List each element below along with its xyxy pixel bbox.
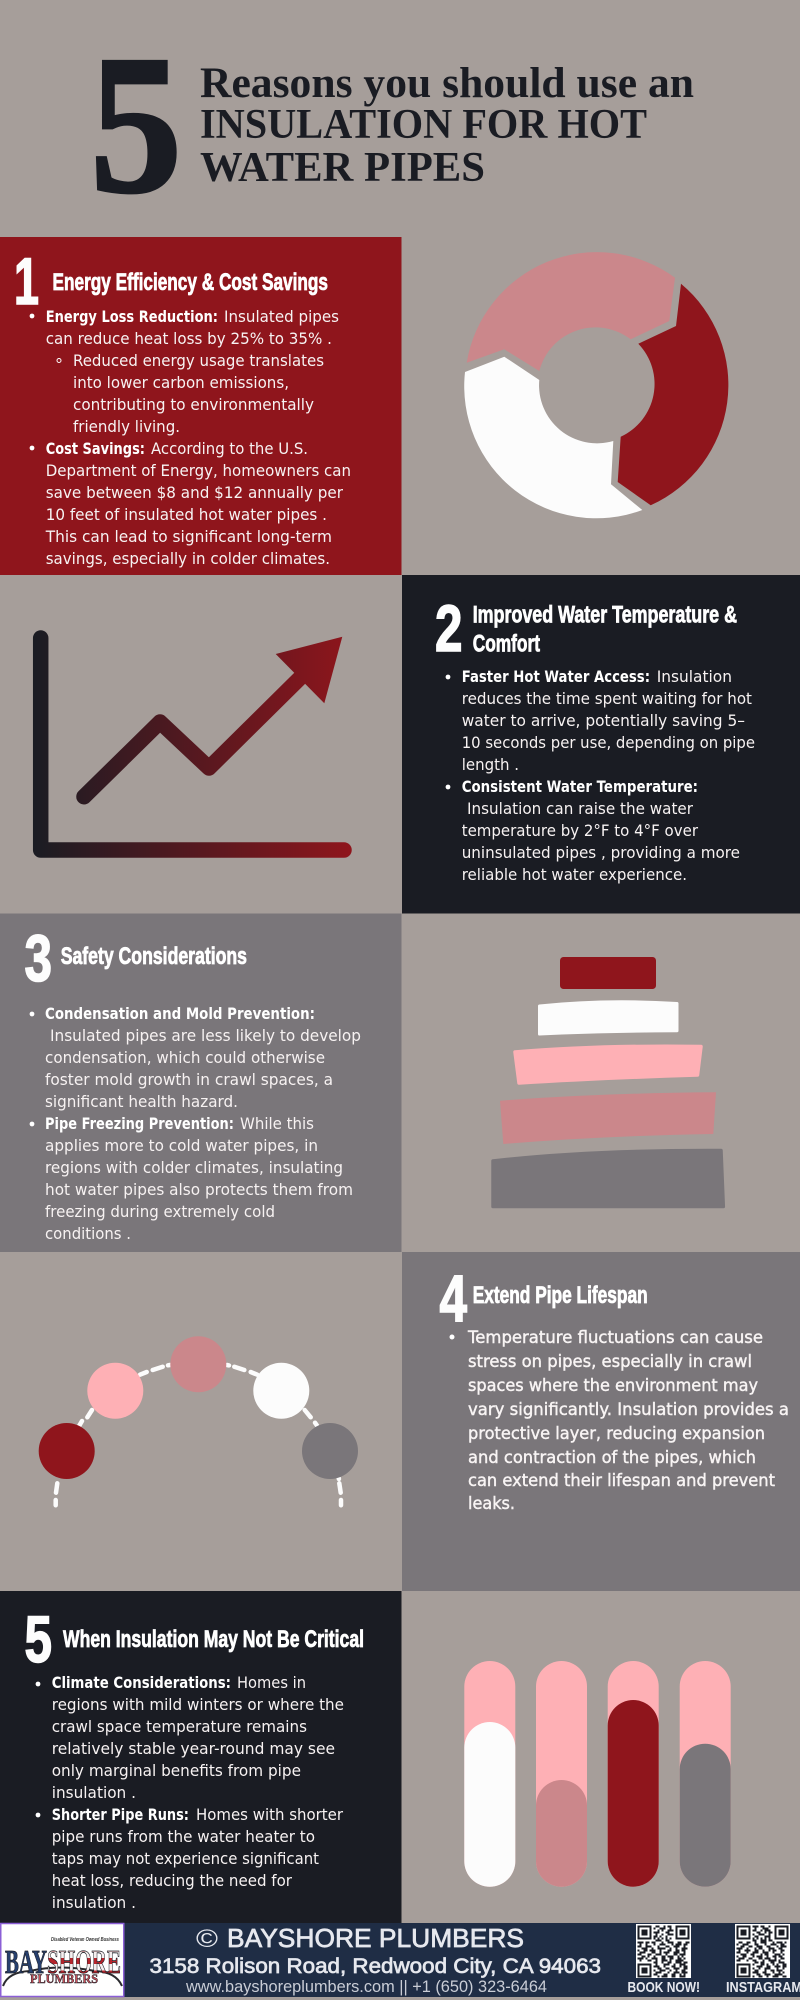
bullet list 4: can extend their lifespan and prevent [468, 1471, 775, 1491]
bullet list 4: and contraction of the pipes, which [468, 1448, 756, 1468]
donut chart [464, 252, 728, 518]
panel: safety considerations [0, 914, 402, 1252]
panel: energy efficiency and cost savings [0, 237, 402, 575]
bullet list 2: length . [462, 755, 519, 774]
address: 3158 Rolison Road, Redwood City, CA 94063 [150, 1954, 601, 1978]
panel: improved water temperature and comfort [402, 575, 800, 914]
bullet list 2: 10 seconds per use, depending on pipe [462, 733, 755, 752]
bullet list 1: Reduced energy usage translates [73, 351, 324, 370]
bullet list 2: uninsulated pipes , providing a more [462, 843, 740, 862]
bullet list 1: Energy Loss Reduction: [46, 307, 218, 326]
bullet list 4: Temperature fluctuations can cause [467, 1328, 763, 1348]
bullet list 2: Faster Hot Water Access: [462, 667, 650, 686]
number 2: 2 [435, 591, 462, 665]
bullet list 1: save between $8 and $12 annually per [46, 483, 343, 502]
bullet list 3: foster mold growth in crawl spaces, a [45, 1070, 333, 1089]
bullet list 1: friendly living. [73, 417, 180, 436]
title line 2: INSULATION FOR HOT [200, 102, 647, 148]
bullet list 4: vary significantly. Insulation provides a [468, 1400, 789, 1420]
bullet list 4: protective layer, reducing expansion [468, 1424, 765, 1444]
bullet list 5: Homes with shorter [196, 1805, 343, 1824]
QR code: book now [636, 1924, 691, 1978]
number 5: 5 [24, 1602, 52, 1676]
company logo: SHORE [47, 1944, 121, 1981]
bullet list 2: reliable hot water experience. [462, 865, 687, 884]
panel: extend pipe lifespan [402, 1252, 800, 1591]
bullet list 5: Climate Considerations: [52, 1673, 231, 1692]
line chart with rising arrow [41, 637, 344, 850]
title line 1: Reasons you should use an [200, 60, 694, 107]
bullet list 1: 10 feet of insulated hot water pipes . [46, 505, 327, 524]
website and phone: www.bayshoreplumbers.com || +1 (650) 323-6464 [185, 1978, 547, 1996]
bullet list 5: only marginal benefits from pipe [52, 1761, 301, 1780]
bullet list 3: Insulated pipes are less likely to develop [50, 1026, 361, 1045]
bullet list 4: leaks. [468, 1494, 515, 1514]
heading 4: Extend Pipe Lifespan [473, 1282, 648, 1309]
title line 3: WATER PIPES [200, 145, 485, 191]
bullet list 2 [446, 667, 755, 884]
bullet list 1: According to the U.S. [151, 439, 308, 458]
bullet list 3: regions with colder climates, insulating [45, 1158, 343, 1177]
bullet list 1: Department of Energy, homeowners can [46, 461, 351, 480]
number 3: 3 [24, 921, 52, 995]
title numeral: 5 [90, 15, 182, 234]
company name: BAYSHORE PLUMBERS [227, 1925, 524, 1953]
bullet list 5: pipe runs from the water heater to [52, 1827, 315, 1846]
bullet list 3: While this [240, 1114, 314, 1133]
number 4: 4 [440, 1261, 467, 1335]
bullet list 3: conditions . [45, 1224, 131, 1243]
company name: © [196, 1925, 219, 1953]
bullet list 4 [450, 1328, 789, 1514]
bullet list 1: can reduce heat loss by 25% to 35% . [46, 329, 332, 348]
bullet list 3: applies more to cold water pipes, in [45, 1136, 318, 1155]
bullet list 1: Insulated pipes [224, 307, 339, 326]
capsule bar chart [464, 1661, 731, 1887]
company logo [1, 1924, 124, 1996]
bullet list 1 [30, 307, 351, 568]
bullet list 3: condensation, which could otherwise [45, 1048, 325, 1067]
bullet list 2: Insulation [657, 667, 732, 686]
stacked tiers illustration [493, 957, 723, 1206]
bullet list 1: savings, especially in colder climates. [46, 549, 330, 568]
bullet list 4: spaces where the environment may [468, 1376, 758, 1396]
bullet list 3: Condensation and Mold Prevention: [45, 1004, 315, 1023]
QR caption: book now: BOOK NOW! [628, 1979, 700, 1996]
QR code: instagram [735, 1924, 790, 1978]
bullet list 3: freezing during extremely cold [45, 1202, 275, 1221]
heading 1: Energy Efficiency & Cost Savings [52, 269, 328, 296]
bullet list 2: water to arrive, potentially saving 5– [462, 711, 745, 730]
bullet list 2: Consistent Water Temperature: [462, 777, 698, 796]
bullet list 1: contributing to environmentally [73, 395, 314, 414]
dotted arc with five circles [39, 1336, 358, 1505]
bullet list 3: significant health hazard. [45, 1092, 238, 1111]
number 1: 1 [14, 244, 39, 318]
bullet list 3: Pipe Freezing Prevention: [45, 1114, 234, 1133]
bullet list 5: taps may not experience significant [52, 1849, 319, 1868]
bullet list 2: temperature by 2°F to 4°F over [462, 821, 698, 840]
heading 3: Safety Considerations [61, 943, 247, 970]
bullet list 5: regions with mild winters or where the [52, 1695, 344, 1714]
bullet list 5: relatively stable year-round may see [52, 1739, 335, 1758]
company logo: PLUMBERS [30, 1971, 98, 1986]
panel: when insulation may not be critical [0, 1591, 402, 1923]
title [90, 15, 694, 234]
bullet list 5: Shorter Pipe Runs: [52, 1805, 189, 1824]
bullet list 1: This can lead to significant long-term [45, 527, 332, 546]
bullet list 3 [30, 1004, 361, 1243]
bullet list 2: Insulation can raise the water [467, 799, 693, 818]
bullet list 5 [36, 1673, 344, 1912]
bullet list 2: reduces the time spent waiting for hot [462, 689, 752, 708]
bullet list 1: Cost Savings: [46, 439, 145, 458]
heading 5: When Insulation May Not Be Critical [63, 1626, 364, 1653]
footer [0, 1923, 800, 1997]
bullet list 5: Homes in [237, 1673, 306, 1692]
bullet list 4: stress on pipes, especially in crawl [468, 1352, 752, 1372]
panel: improved water temperature and comfort: Comfort [473, 631, 540, 658]
bullet list 1: into lower carbon emissions, [73, 373, 289, 392]
bullet list 5: heat loss, reducing the need for [52, 1871, 292, 1890]
company logo: Disabled Veteran Owned Business [51, 1937, 119, 1943]
company logo: BAY [5, 1944, 47, 1981]
bullet list 5: crawl space temperature remains [52, 1717, 307, 1736]
bullet list 5: insulation . [52, 1783, 136, 1802]
bullet list 3: hot water pipes also protects them from [45, 1180, 353, 1199]
bullet list 5: insulation . [52, 1893, 136, 1912]
